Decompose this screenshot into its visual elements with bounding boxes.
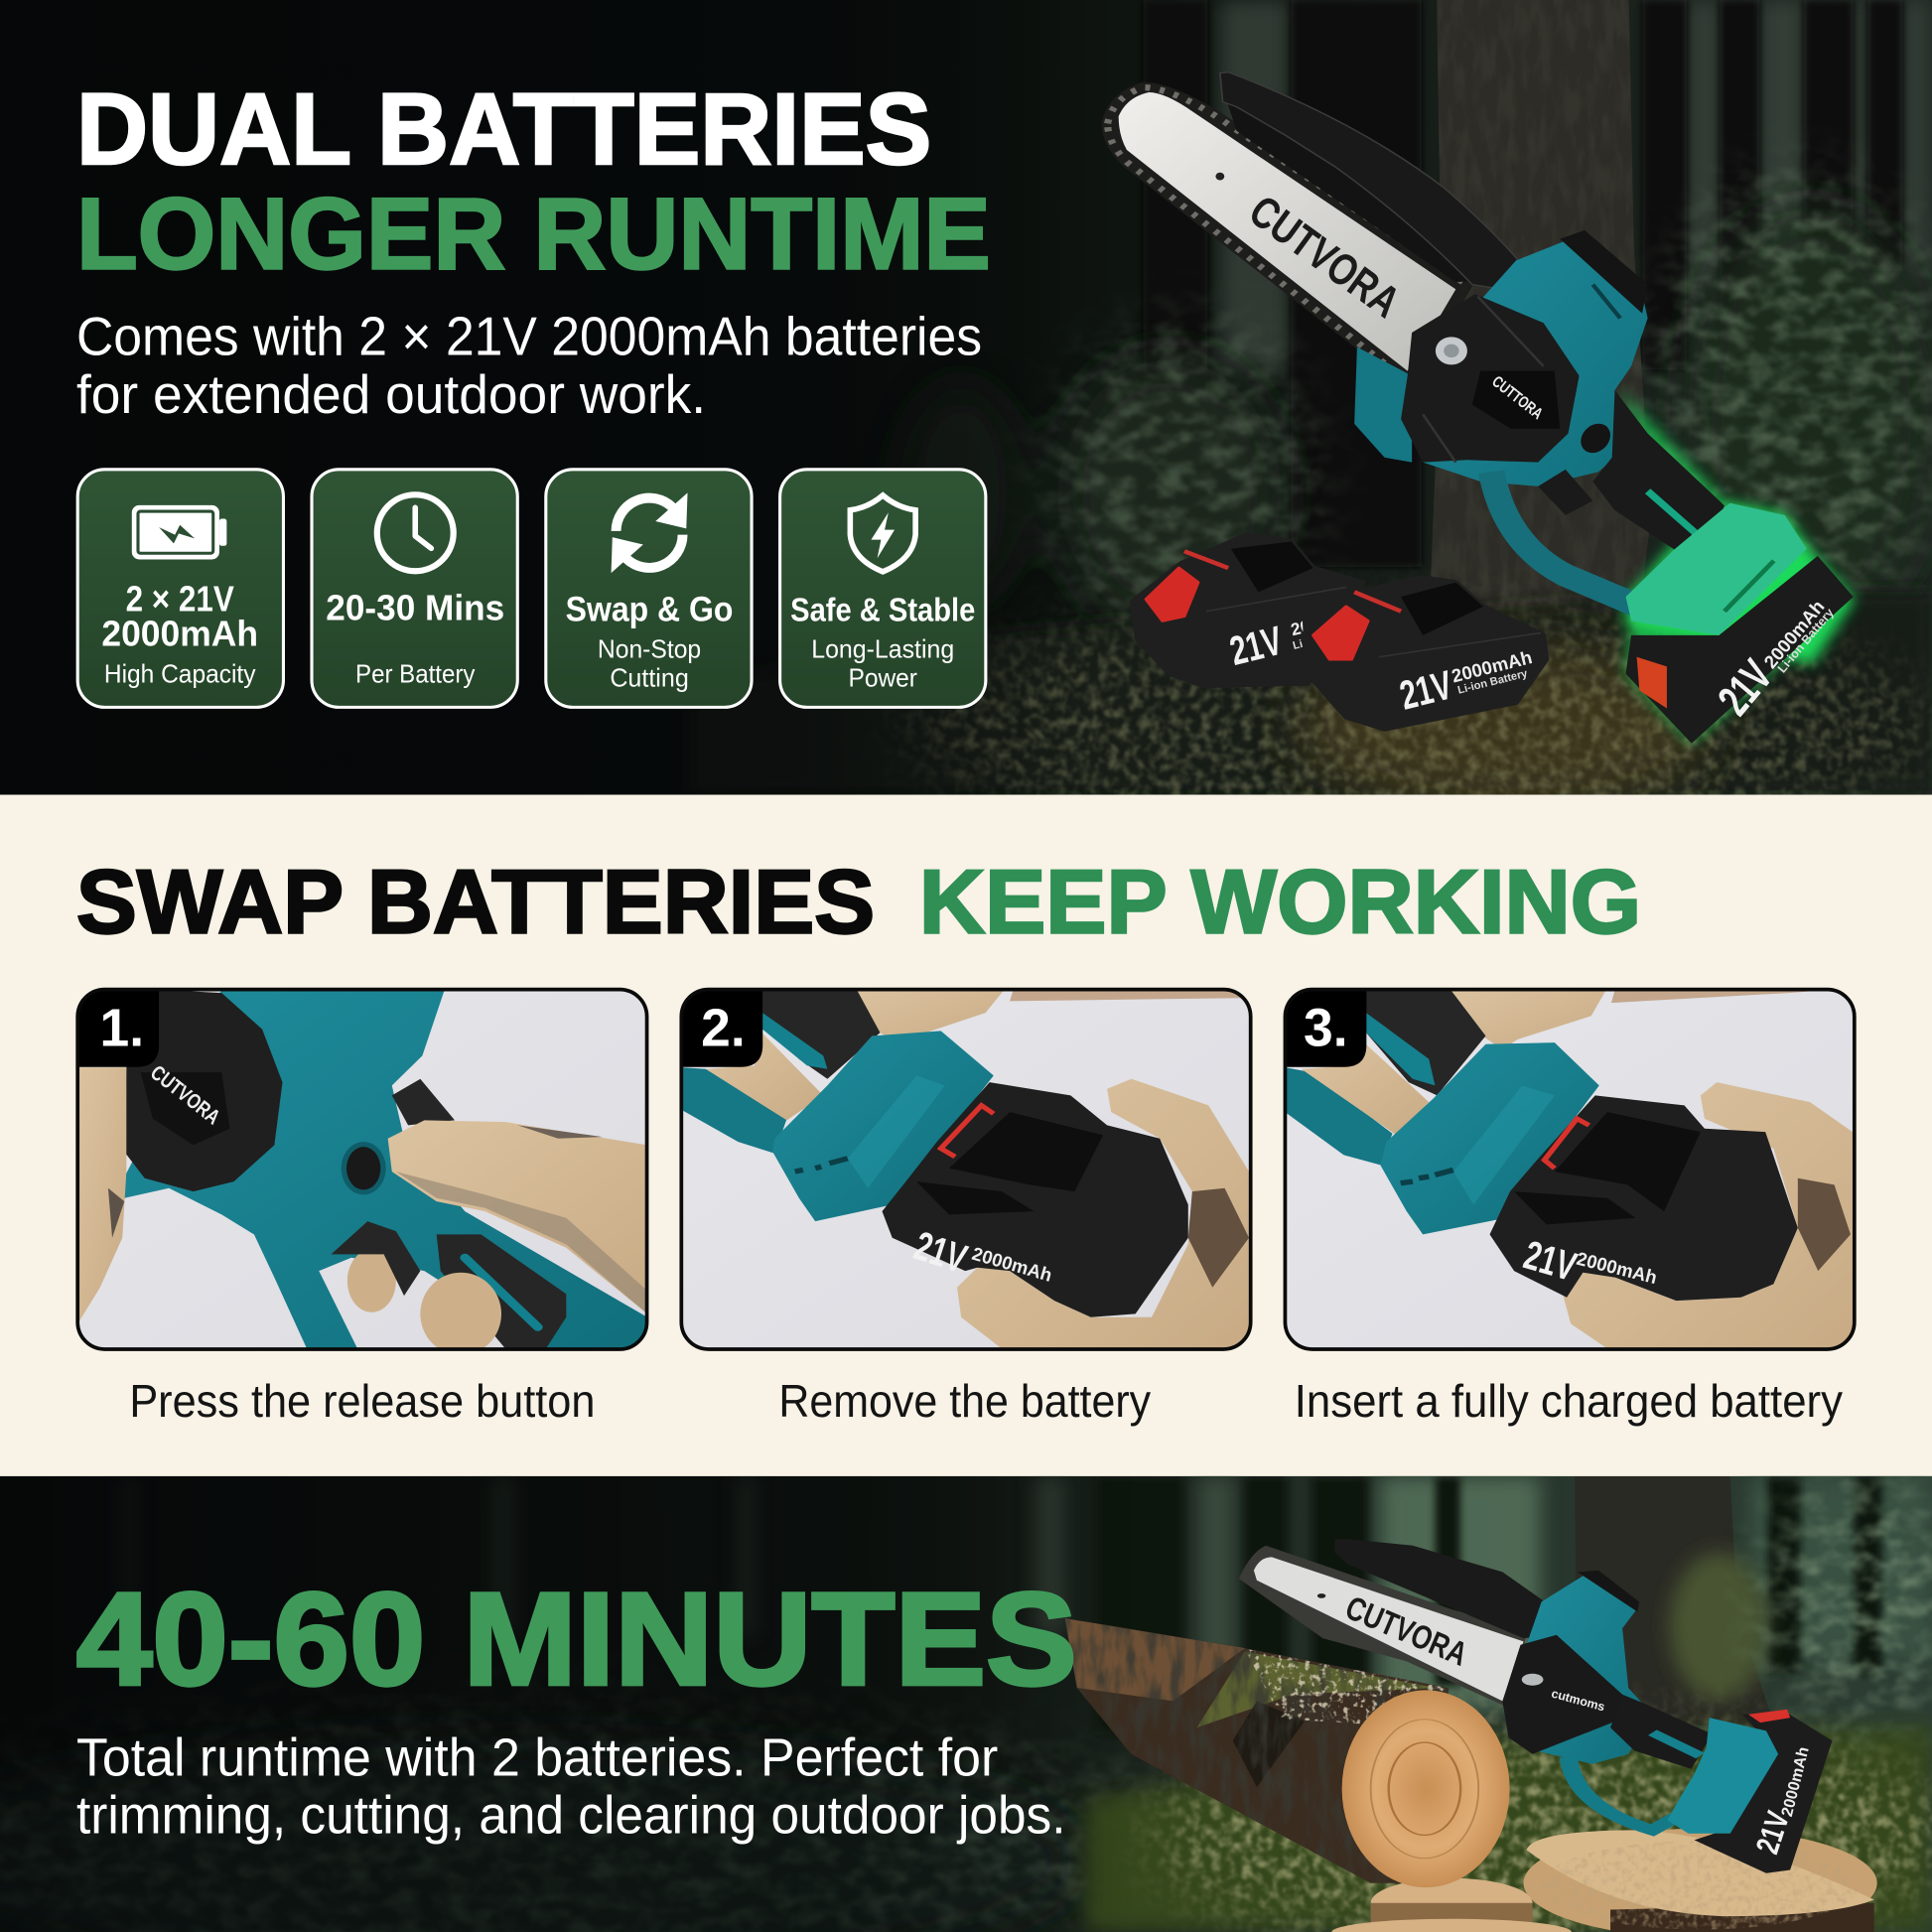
handle [1366, 988, 1485, 1095]
black gear cover [1401, 294, 1580, 463]
number: 2. [701, 1000, 746, 1058]
card: swap and go: Non-Stop [598, 634, 701, 664]
bark specks [1244, 1649, 1449, 1725]
card: swap and go: Cutting [610, 662, 689, 692]
black grip [1592, 390, 1725, 554]
loop [1569, 1757, 1695, 1830]
icon: battery [132, 505, 226, 559]
main battery [1626, 556, 1854, 744]
left fingers [1302, 1042, 1429, 1135]
top guard [1220, 72, 1530, 290]
fingers [347, 1249, 396, 1312]
subtitle [76, 306, 982, 425]
spare battery left: 20 [1289, 616, 1312, 639]
body text: Total runtime with 2 batteries. Perfect for [76, 1728, 998, 1787]
guide bar [1119, 92, 1455, 371]
release button [1575, 419, 1616, 458]
saw labels: CUTVORA [1240, 187, 1409, 328]
mossy floor right [1084, 1725, 1932, 1932]
spare battery left: Li [1292, 638, 1304, 652]
chainsaw hero: 2000mAh [1759, 596, 1829, 672]
number: 1. [100, 1000, 144, 1058]
chainsaw on log: cutmoms [1550, 1687, 1606, 1714]
handle [762, 988, 880, 1079]
caption: step 3: Insert a fully charged battery [1295, 1375, 1843, 1427]
panel: bottom forest [0, 1476, 1932, 1932]
chainsaw hero: CUTTORA [1488, 372, 1547, 423]
lower grip [437, 1234, 566, 1348]
number: 3. [1304, 1000, 1348, 1058]
card: safe and stable: Safe & Stable [790, 592, 975, 628]
badge [1285, 990, 1366, 1067]
arm [1611, 988, 1851, 1003]
trigger [1538, 470, 1592, 515]
battery [1490, 1095, 1798, 1301]
glove right [1563, 1082, 1853, 1348]
spare battery right [1305, 578, 1546, 729]
forest background bottom [0, 1476, 1932, 1932]
upper grip [392, 1079, 455, 1125]
card: swap and go: Swap & Go [566, 591, 733, 628]
log bark [1065, 1618, 1449, 1883]
spare battery right: 21V [1395, 661, 1457, 719]
step label: CUTVORA [146, 1061, 224, 1129]
top glove [1446, 988, 1607, 1049]
teal base [1667, 1718, 1778, 1834]
card: capacity: 2000mAh [101, 613, 258, 653]
battery cap [1560, 230, 1648, 314]
spare battery right: 2000mAh [1449, 646, 1534, 687]
handle loop [1491, 472, 1639, 607]
battery label: 21V [909, 1222, 973, 1282]
teal loop [1285, 1067, 1393, 1165]
red latch [941, 1105, 994, 1157]
icon: shield bolt [850, 495, 915, 572]
thumb glove [388, 1120, 647, 1313]
release button [342, 1142, 386, 1194]
panel: step 3 [1285, 988, 1855, 1349]
teal motor housing [1423, 236, 1648, 486]
mossy ground [878, 582, 1932, 792]
heading: keep working: KEEP WORKING [919, 852, 1641, 952]
teal tool body [120, 990, 647, 1348]
spare battery right: Li-ion Battery [1456, 667, 1530, 697]
card: capacity: High Capacity [104, 659, 256, 689]
red latch [1545, 1119, 1589, 1169]
battery [883, 1082, 1188, 1317]
tree trunk [1430, 0, 1651, 617]
glove right [957, 1079, 1249, 1348]
chainsaw hero: 21V [1708, 649, 1782, 725]
caption: step 1: Press the release button [129, 1375, 595, 1427]
grip [1610, 1695, 1713, 1769]
panel: step 2 [679, 988, 1251, 1349]
green battery glow [1620, 390, 1854, 744]
panel: top forest hero [0, 0, 1932, 844]
top glove [848, 988, 1006, 1042]
bolt [1436, 337, 1467, 364]
spare battery left [1132, 534, 1362, 686]
chain [1108, 87, 1466, 380]
card: swap and go [546, 470, 752, 707]
guide bar [1254, 1557, 1524, 1701]
bark texture [1064, 1618, 1449, 1882]
stump [1524, 1829, 1877, 1932]
badge [681, 990, 762, 1067]
panel: step 1 [77, 990, 647, 1355]
card: safe and stable: Power [848, 662, 917, 692]
card: safe and stable: Long-Lasting [811, 634, 954, 664]
card: capacity [77, 470, 283, 707]
chain [1239, 1546, 1527, 1708]
motor [1527, 1574, 1652, 1764]
log end [1342, 1690, 1510, 1887]
forest background top [0, 0, 1932, 844]
trigger [332, 1221, 420, 1296]
card: safe and stable [780, 470, 986, 707]
subtitle: for extended outdoor work. [76, 364, 706, 425]
guard [1334, 1539, 1569, 1638]
card: runtime [312, 470, 517, 707]
black cover [1502, 1635, 1622, 1754]
badge [77, 990, 159, 1067]
sawdust disc [1371, 1878, 1533, 1928]
illustration: log and stump [1064, 1618, 1877, 1932]
title: dual batteries: DUAL BATTERIES [76, 72, 931, 186]
subtitle: Comes with 2 × 21V 2000mAh batteries [76, 306, 982, 366]
teal housing [1380, 1042, 1599, 1234]
body text [76, 1728, 1066, 1846]
icon: swap arrows [612, 492, 688, 573]
battery [1695, 1711, 1832, 1873]
heading: swap batteries: SWAP BATTERIES [76, 852, 875, 952]
arm [1010, 988, 1249, 1001]
dim undergrowth [0, 1737, 1084, 1932]
chainsaw on log: 21V [1749, 1807, 1796, 1858]
gap behind guard [1228, 104, 1467, 282]
card: capacity: 2 × 21V [126, 579, 234, 620]
glowing base [1626, 503, 1807, 635]
card: runtime: Per Battery [355, 659, 475, 689]
black gear cover [124, 990, 283, 1191]
teal loop [679, 1067, 787, 1154]
body text: trimming, cutting, and clearing outdoor jobs. [76, 1787, 1066, 1846]
panel: step 3: 2000mAh [1575, 1248, 1659, 1288]
chainsaw on log: 2000mAh [1778, 1745, 1813, 1819]
left fingers [706, 1030, 823, 1120]
battery label: 21V [1519, 1232, 1582, 1290]
title: longer runtime: LONGER RUNTIME [76, 178, 991, 291]
teal housing [772, 1031, 994, 1221]
chainsaw hero: Li-ion Battery [1775, 606, 1837, 675]
ribbed strip [1354, 346, 1412, 463]
chainsaw on log [1239, 1539, 1832, 1873]
icon: clock [377, 494, 454, 571]
title: 40-60 minutes: 40-60 MINUTES [76, 1567, 1077, 1714]
left glove [77, 1067, 126, 1323]
chainsaw hero [1108, 72, 1854, 744]
card: runtime: 20-30 Mins [326, 587, 504, 627]
sawdust grain [1540, 1841, 1861, 1930]
saw labels: CUTVORA [1340, 1589, 1472, 1674]
caption: step 2: Remove the battery [778, 1375, 1151, 1427]
panel: step 2: 2000mAh [970, 1243, 1054, 1286]
spare battery left: 21V [1225, 618, 1287, 674]
large trunk [1575, 1476, 1774, 1725]
